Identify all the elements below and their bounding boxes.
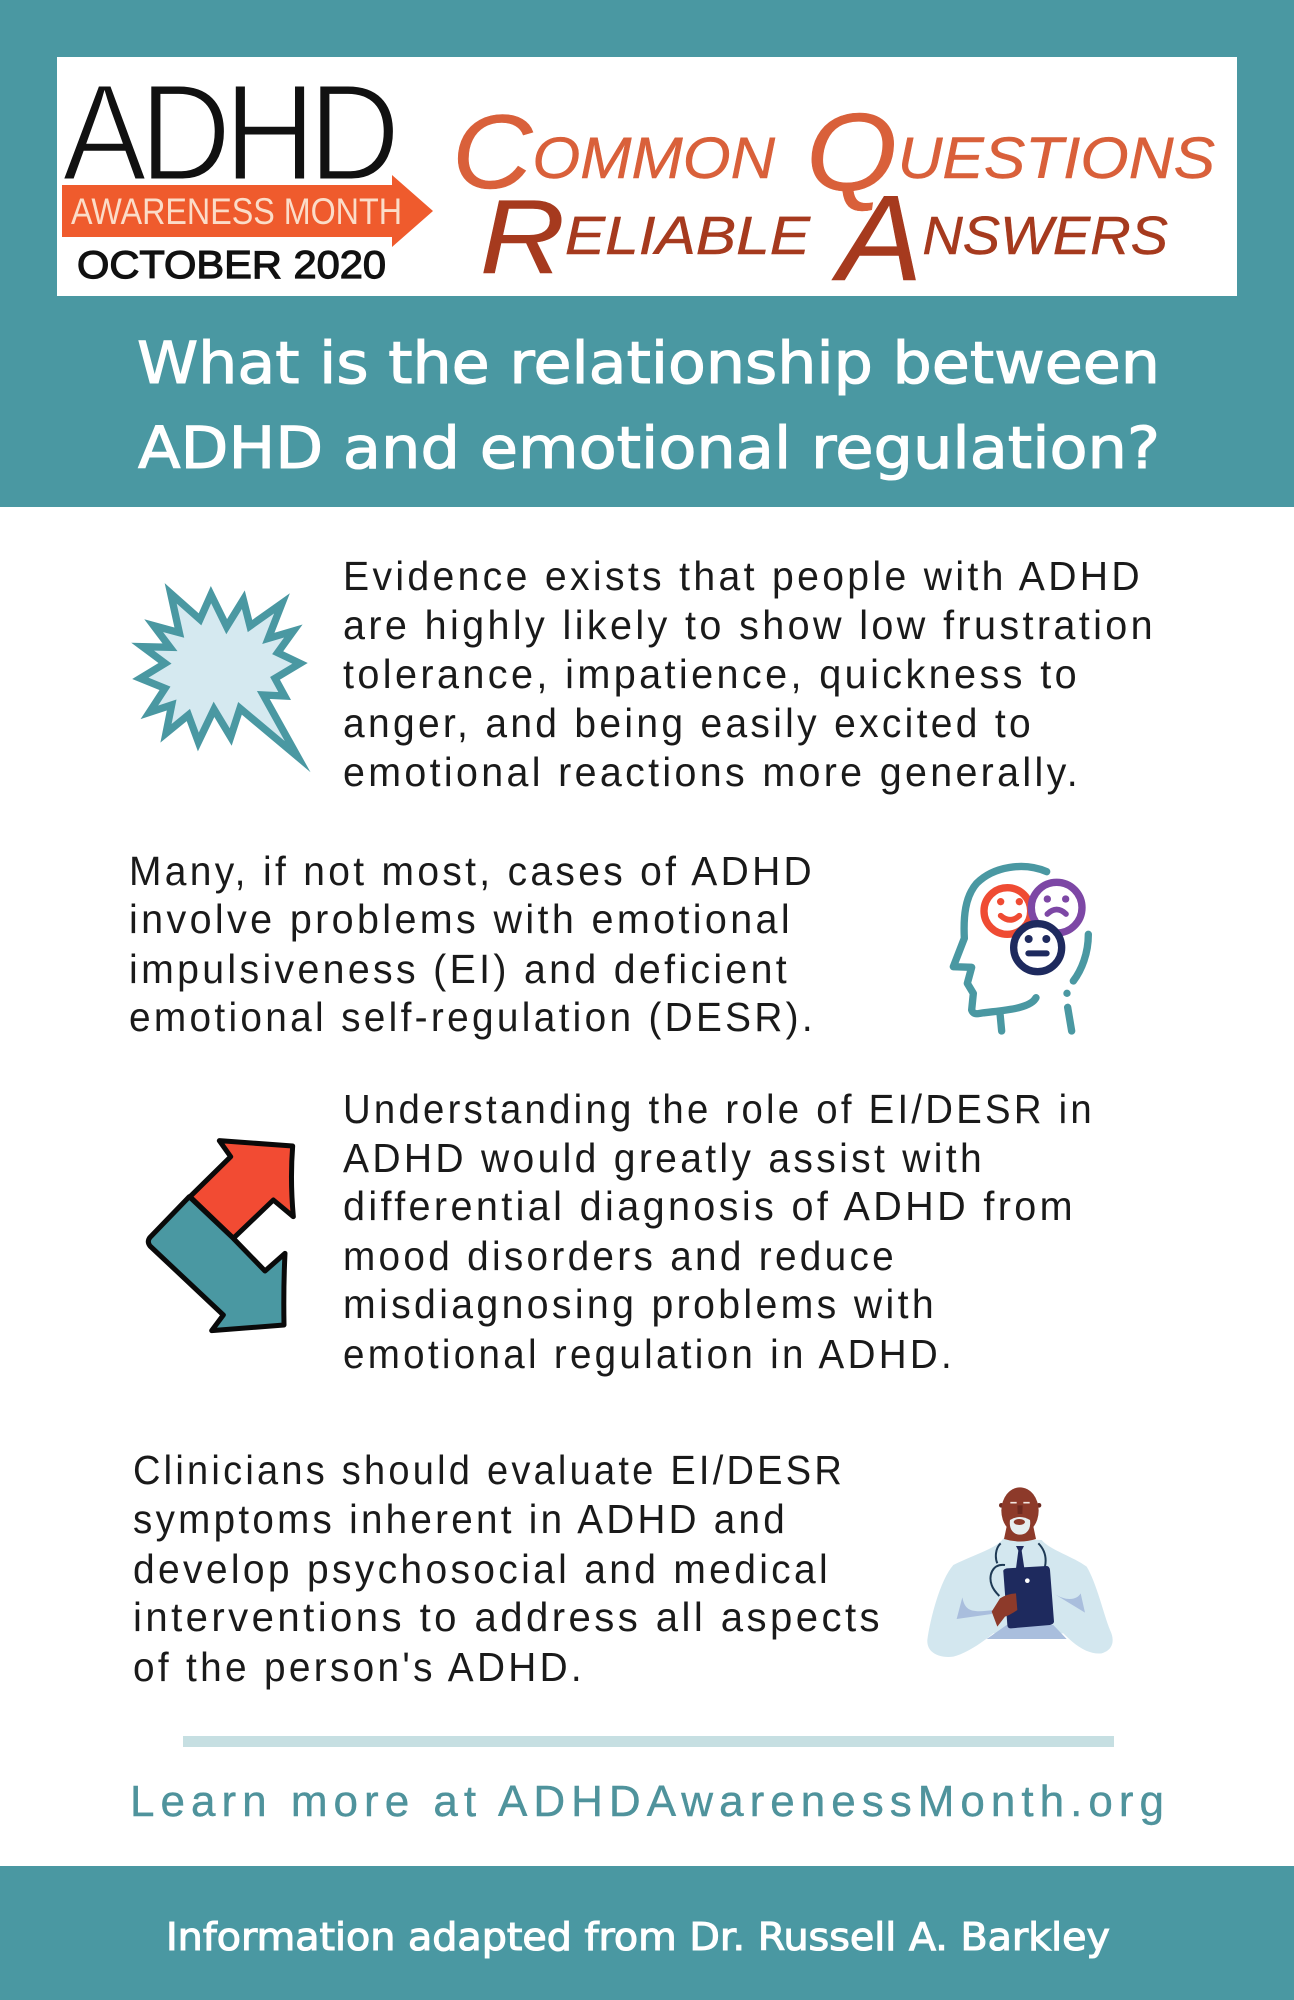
text block: evidence: Evidence exists that people with ADHD bbox=[343, 553, 1143, 599]
banner title: Common Questions Reliable Answers: UESTIONS bbox=[898, 126, 1215, 191]
main heading bbox=[137, 329, 1160, 482]
icon: diverging arrows bbox=[148, 1141, 293, 1331]
text block: emotional impulsiveness: involve problems with emotional bbox=[129, 896, 793, 942]
text block: clinicians: Clinicians should evaluate EI/DESR bbox=[133, 1447, 845, 1493]
call to action link text: Learn more at ADHDAwarenessMonth.org bbox=[130, 1777, 1164, 1826]
text block: emotional impulsiveness: Many, if not most, cases of ADHD bbox=[129, 848, 815, 894]
text block: emotional impulsiveness: emotional self-regulation (DESR). bbox=[129, 994, 816, 1040]
icon: doctor with clipboard bbox=[927, 1487, 1113, 1657]
icon: anger speech burst bbox=[140, 593, 300, 757]
logo: ADHD Awareness Month: AWARENESS MONTH bbox=[71, 191, 402, 232]
footer band bbox=[0, 1866, 1294, 2000]
logo: ADHD Awareness Month: OCTOBER 2020 bbox=[77, 244, 386, 287]
banner panel bbox=[57, 56, 1237, 306]
text block: clinicians: develop psychosocial and medical bbox=[133, 1546, 831, 1592]
text block: evidence: anger, and being easily excited to bbox=[343, 700, 1034, 746]
banner title: Common Questions Reliable Answers: A bbox=[831, 170, 922, 306]
banner title: Common Questions Reliable Answers: C bbox=[452, 94, 534, 211]
banner title: Common Questions Reliable Answers bbox=[452, 91, 1215, 306]
text block: clinicians bbox=[133, 1447, 883, 1690]
text block: clinicians: interventions to address all aspects bbox=[133, 1594, 883, 1640]
banner title: Common Questions Reliable Answers: ELIABLE bbox=[565, 206, 811, 266]
icon: head with emotion faces bbox=[953, 867, 1088, 1031]
text block: evidence: tolerance, impatience, quickness to bbox=[343, 651, 1080, 697]
text block: evidence: emotional reactions more generally. bbox=[343, 749, 1081, 795]
text block: emotional impulsiveness bbox=[129, 848, 816, 1040]
text block: emotional impulsiveness: impulsiveness (EI) and deficient bbox=[129, 946, 790, 992]
text block: differential diagnosis: ADHD would greatly assist with bbox=[343, 1135, 985, 1181]
main heading: What is the relationship between bbox=[137, 329, 1160, 397]
text block: evidence bbox=[343, 553, 1156, 795]
text block: differential diagnosis: Understanding the role of EI/DESR in bbox=[343, 1086, 1095, 1132]
header band bbox=[0, 0, 1294, 507]
banner title: Common Questions Reliable Answers: Q bbox=[806, 91, 898, 214]
main heading: ADHD and emotional regulation? bbox=[138, 414, 1160, 482]
banner title: Common Questions Reliable Answers: R bbox=[480, 179, 565, 296]
banner title: Common Questions Reliable Answers: OMMON bbox=[532, 126, 775, 191]
divider rule bbox=[183, 1736, 1114, 1747]
logo: ADHD Awareness Month: ADHD bbox=[62, 56, 395, 210]
logo: ADHD Awareness Month bbox=[62, 56, 433, 287]
text block: differential diagnosis: differential diagnosis of ADHD from bbox=[343, 1183, 1076, 1229]
text block: clinicians: symptoms inherent in ADHD and bbox=[133, 1496, 788, 1542]
text block: differential diagnosis bbox=[343, 1086, 1095, 1377]
footer credit: Information adapted from Dr. Russell A. Barkley bbox=[166, 1915, 1110, 1959]
text block: differential diagnosis: mood disorders and reduce bbox=[343, 1233, 897, 1279]
text block: differential diagnosis: emotional regulation in ADHD. bbox=[343, 1331, 955, 1377]
banner title: Common Questions Reliable Answers: NSWERS bbox=[922, 206, 1168, 266]
text block: evidence: are highly likely to show low frustration bbox=[343, 602, 1156, 648]
text block: differential diagnosis: misdiagnosing problems with bbox=[343, 1281, 937, 1327]
text block: clinicians: of the person's ADHD. bbox=[133, 1644, 585, 1690]
